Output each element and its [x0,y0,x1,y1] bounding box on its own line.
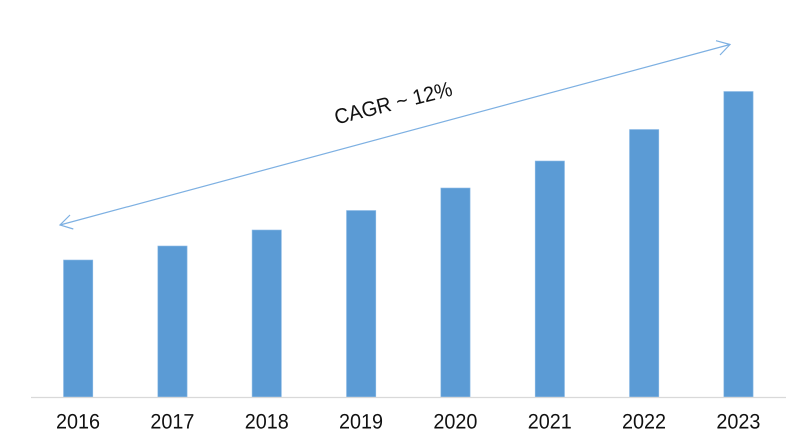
year labels: 2022 [622,410,666,434]
year labels: 2023 [716,410,760,434]
bars [64,92,753,397]
year labels [56,410,760,434]
year labels: 2021 [528,410,572,434]
year labels: 2018 [245,410,289,434]
CAGR label: CAGR ~ 12% [332,78,455,130]
year labels: 2020 [433,410,477,434]
year labels: 2019 [339,410,383,434]
arrow: growth trend [60,41,730,229]
year labels: 2016 [56,410,100,434]
year labels: 2017 [150,410,194,434]
